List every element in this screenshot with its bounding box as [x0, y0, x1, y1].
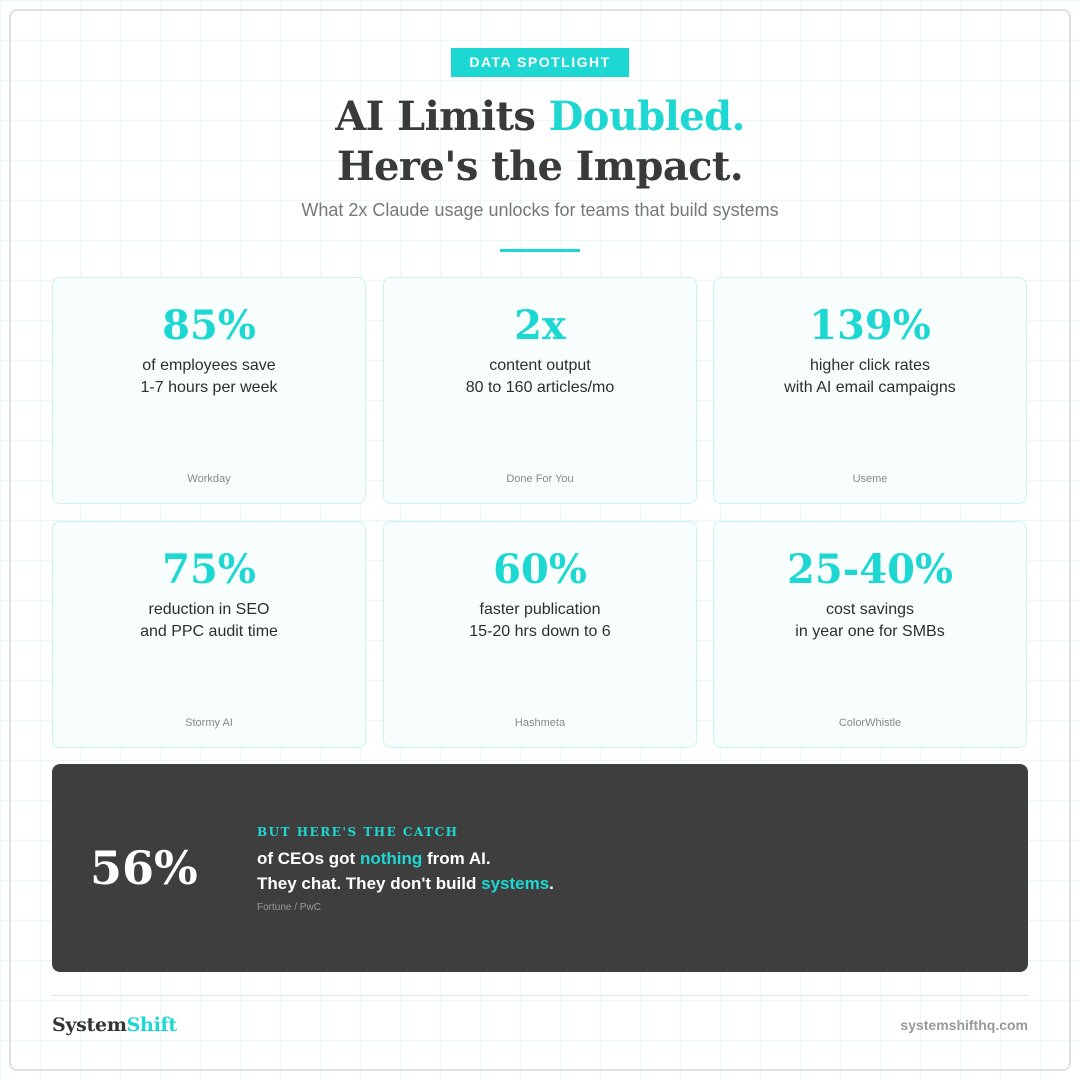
- card: 2x: 2x: [514, 302, 566, 349]
- card: 60%: Hashmeta: [515, 717, 565, 729]
- card: 85%: 1-7 hours per week: [141, 379, 277, 396]
- card: 25-40%: 25-40%: [787, 546, 953, 593]
- big stat: 56%: [90, 841, 198, 895]
- card: 25-40%: in year one for SMBs: [795, 623, 945, 640]
- card: 75%: [52, 521, 366, 748]
- url: systemshifthq.com: [900, 1017, 1028, 1033]
- panel: catch: [52, 764, 1028, 972]
- title: [334, 93, 745, 190]
- catch text: [257, 849, 554, 893]
- card: 60%: 60%: [493, 546, 587, 593]
- card: 85%: Workday: [187, 473, 231, 485]
- card: 85%: [52, 277, 366, 504]
- catch label: BUT HERE'S THE CATCH: [257, 825, 458, 839]
- source: Fortune / PwC: [257, 902, 321, 913]
- card: 85%: of employees save: [142, 357, 276, 374]
- card: 139%: 139%: [809, 302, 931, 349]
- card: 75%: 75%: [162, 546, 256, 593]
- card: 2x: [383, 277, 697, 504]
- card: 60%: [383, 521, 697, 748]
- card: 25-40%: cost savings: [826, 601, 914, 618]
- card: 25-40%: ColorWhistle: [839, 717, 901, 729]
- card: 2x: content output: [489, 357, 591, 374]
- card: 60%: faster publication: [480, 601, 600, 618]
- logo: SystemShift: [52, 1014, 177, 1036]
- card: 139%: higher click rates: [810, 357, 930, 374]
- card: 75%: reduction in SEO: [149, 601, 269, 618]
- subtitle: What 2x Claude usage unlocks for teams that build systems: [301, 200, 779, 220]
- card: 60%: 15-20 hrs down to 6: [469, 623, 611, 640]
- card: 2x: Done For You: [506, 473, 574, 485]
- card: 25-40%: [713, 521, 1027, 748]
- card: 2x: 80 to 160 articles/mo: [466, 379, 614, 396]
- card: 75%: and PPC audit time: [140, 623, 278, 640]
- catch text: They chat. They don't build systems.: [257, 874, 554, 893]
- card: 75%: Stormy AI: [185, 717, 233, 729]
- card: 139%: Useme: [853, 473, 887, 485]
- card: 139%: [713, 277, 1027, 504]
- badge: DATA SPOTLIGHT: [469, 54, 611, 70]
- title: AI Limits Doubled.: [335, 93, 745, 140]
- catch text: of CEOs got nothing from AI.: [257, 849, 491, 868]
- card: 139%: with AI email campaigns: [784, 379, 956, 396]
- card: 85%: 85%: [162, 302, 256, 349]
- title: Here's the Impact.: [337, 143, 743, 190]
- badge: [451, 48, 629, 77]
